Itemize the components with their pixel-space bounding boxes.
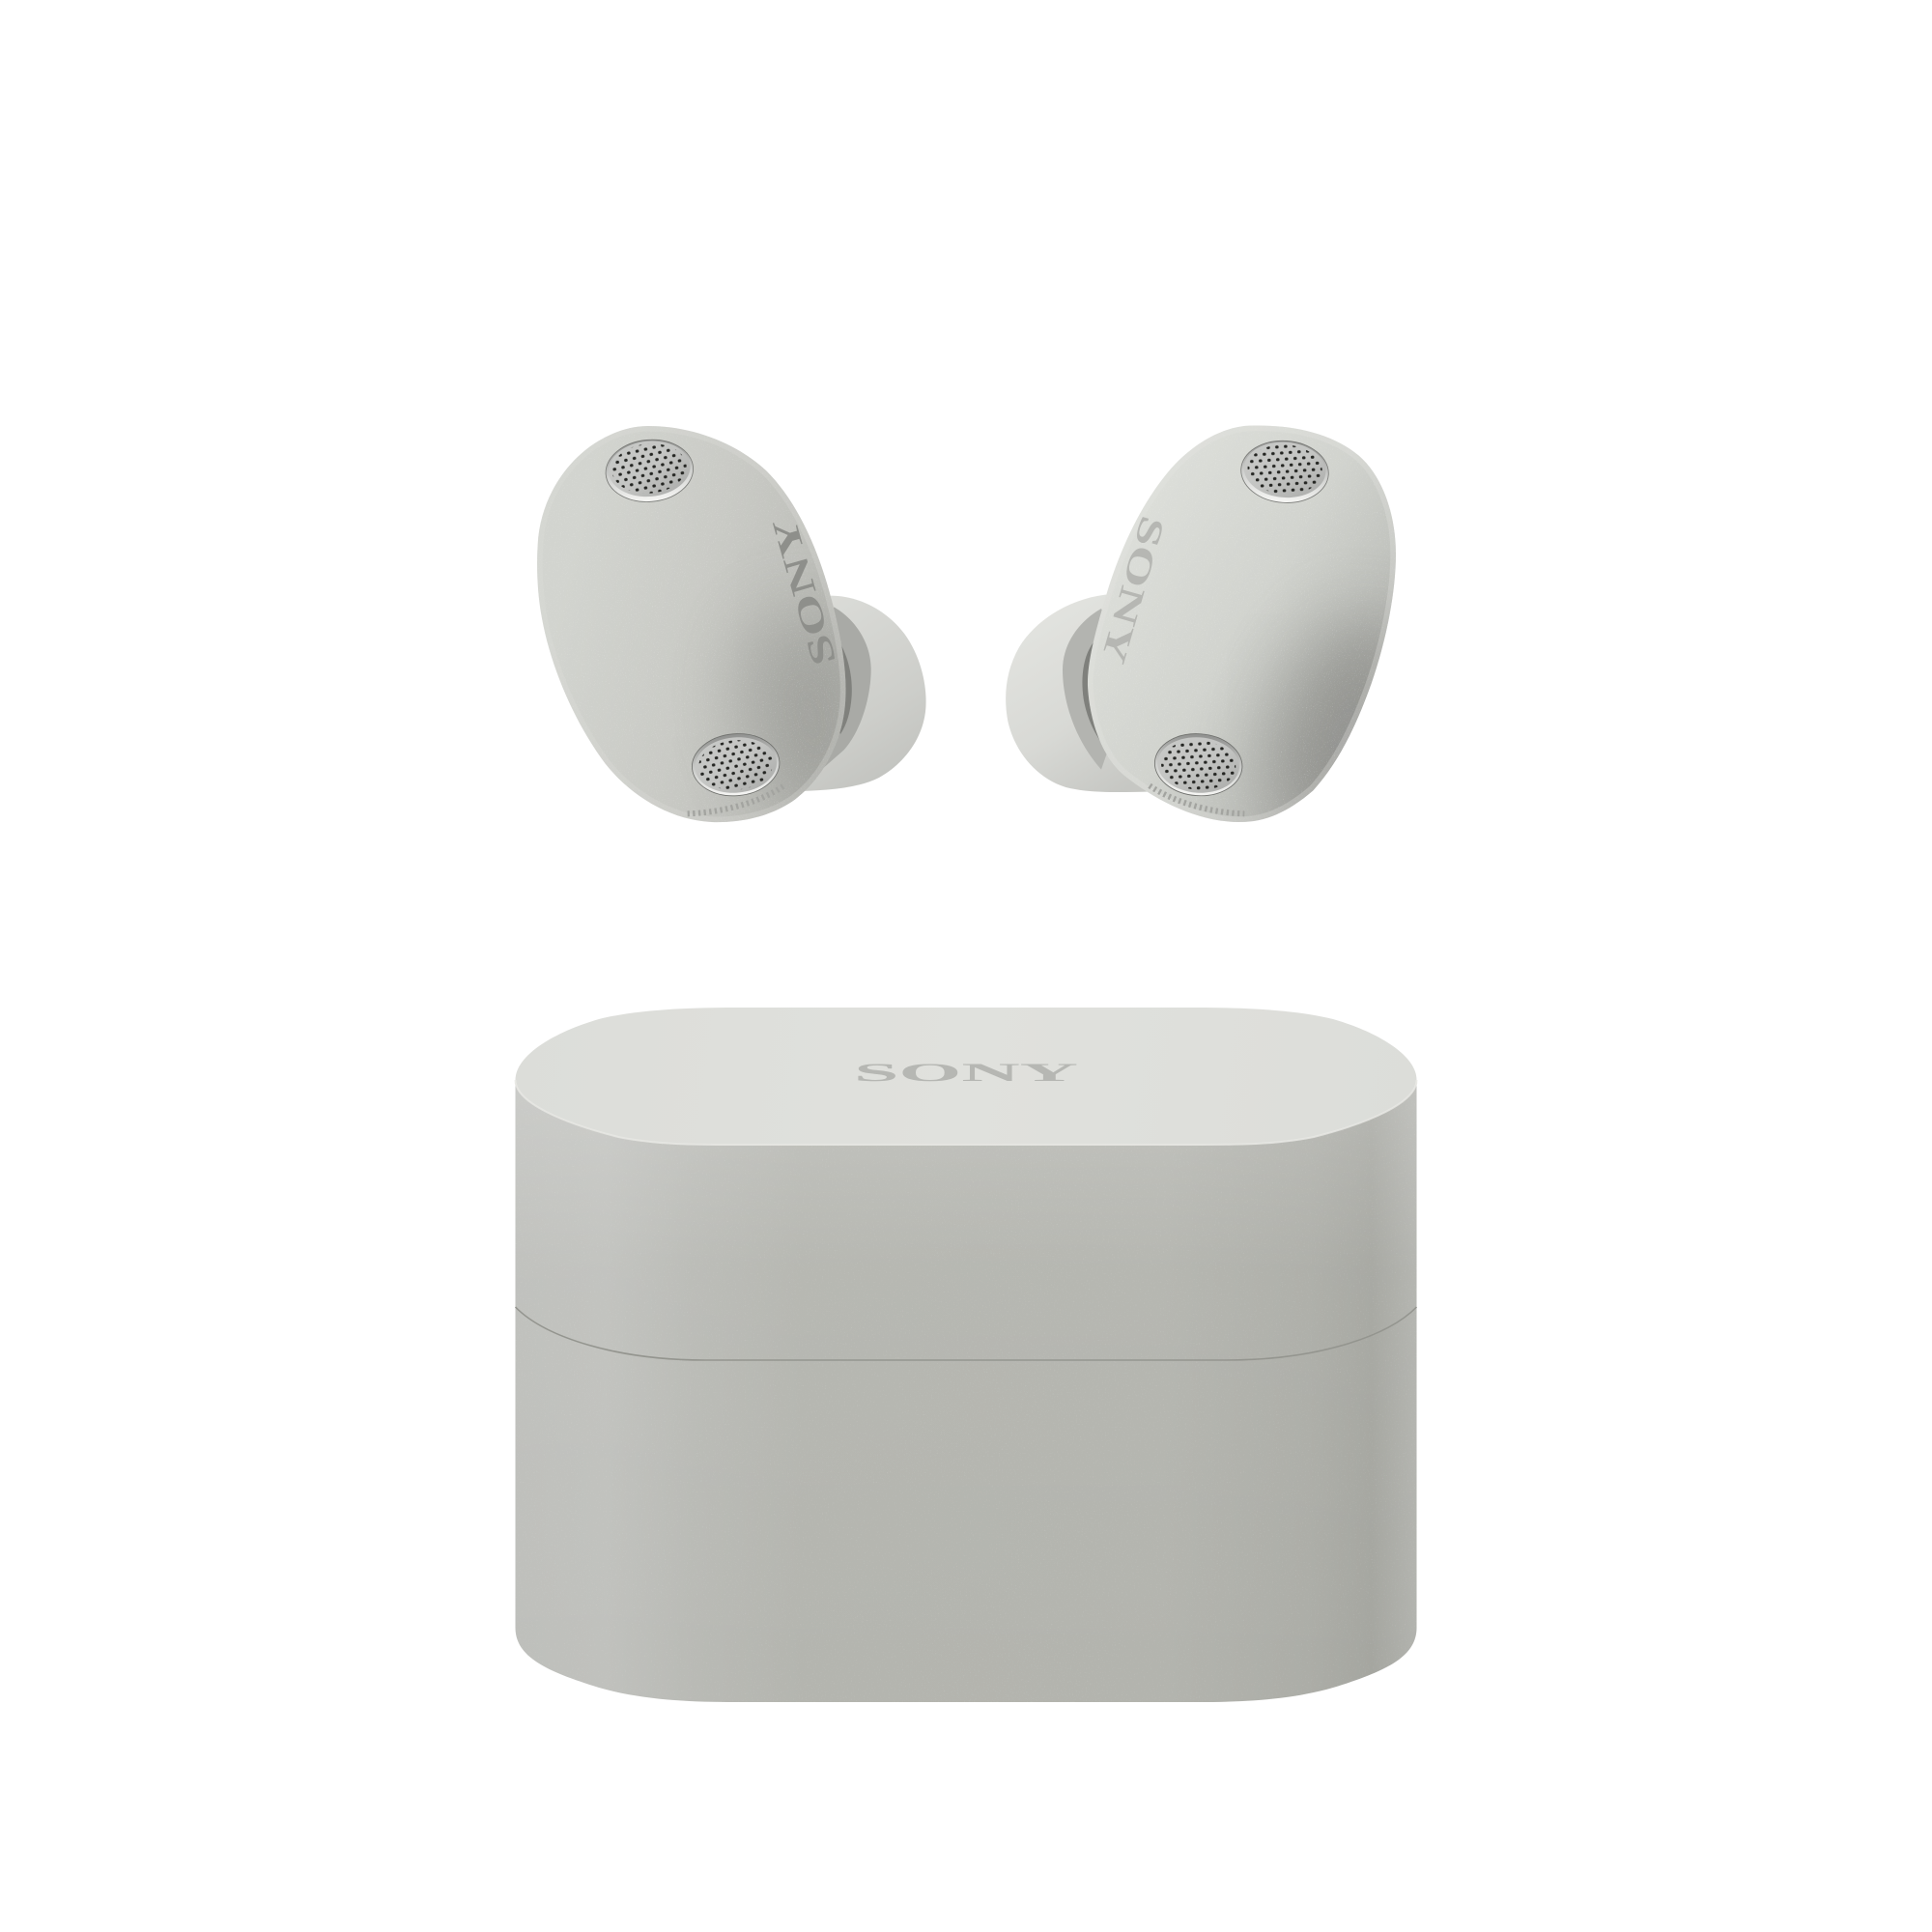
left earbud logo: SONY [765,514,844,669]
left earbud [531,422,926,838]
right earbud body [1088,426,1396,822]
right tip collar [1063,609,1133,770]
left ear tip [792,596,926,791]
case logo: SONY [854,1059,1079,1087]
left earbud body [537,426,846,822]
case lid top [516,1008,1416,1145]
charging case [483,1008,1449,1719]
right vent ticks [1150,785,1244,813]
left vent ticks [688,785,784,813]
right upper microphone grille [1239,438,1330,505]
product illustration [514,425,1418,1702]
case body [516,1080,1416,1702]
right earbud [1006,425,1396,822]
left lower microphone grille [690,730,782,799]
right lower microphone grille [1152,731,1244,799]
right ear tip [1006,594,1156,792]
right tip gap [1082,640,1121,747]
right earbud logo: SONY [1094,512,1173,668]
left tip collar [805,607,871,773]
left tip gap [824,640,852,734]
left upper microphone grille [603,437,696,505]
case seam [516,1307,1416,1360]
